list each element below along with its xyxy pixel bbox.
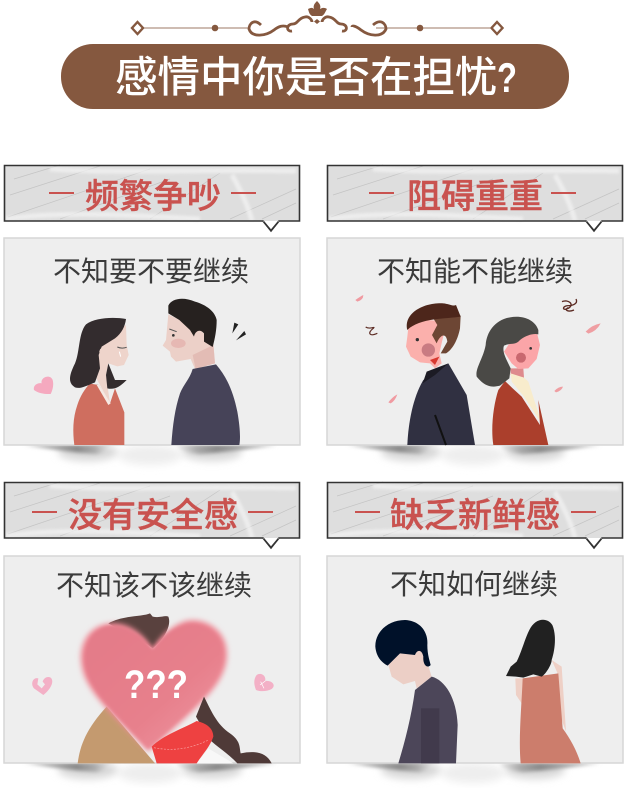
text: 不知能不能继续: 不知能不能继续 <box>377 256 573 287</box>
header: 阻碍重重 <box>328 165 622 231</box>
panel: 没有安全感 <box>4 482 300 783</box>
illustration: back-to-back couple <box>355 295 601 445</box>
header: 没有安全感: 没有安全感 <box>68 497 238 535</box>
illustration: heart hiding couple <box>32 613 274 763</box>
shadow under card <box>24 443 278 465</box>
card background <box>4 556 300 763</box>
panel: 阻碍重重 <box>327 165 623 465</box>
text: 不知如何继续: 不知如何继续 <box>390 569 558 600</box>
illustration: couple turned away <box>375 620 581 763</box>
panel: 缺乏新鲜感 <box>327 482 623 783</box>
text: 不知要不要继续: 不知要不要继续 <box>53 256 249 287</box>
card background <box>4 238 300 445</box>
header: 频繁争吵: 频繁争吵 <box>85 178 221 216</box>
header: 没有安全感 <box>4 482 300 548</box>
shadow under card <box>347 443 601 465</box>
title banner: 感情中你是否在担忧 <box>115 55 498 102</box>
header: 阻碍重重: 阻碍重重 <box>407 178 543 216</box>
panel: 频繁争吵 <box>4 165 300 465</box>
text: 不知该不该继续: 不知该不该继续 <box>56 570 252 601</box>
card background <box>327 556 623 763</box>
header: 缺乏新鲜感 <box>328 482 622 548</box>
shadow under card <box>347 761 601 783</box>
header: 缺乏新鲜感: 缺乏新鲜感 <box>390 497 560 535</box>
header: 频繁争吵 <box>4 165 300 231</box>
shadow under card <box>24 761 278 783</box>
decorative ornament <box>132 1 502 35</box>
text: question marks: ??? <box>124 663 188 707</box>
card background <box>327 238 623 445</box>
illustration: quarrelling couple <box>34 299 246 445</box>
title banner <box>61 44 569 109</box>
title banner: ? <box>497 54 517 101</box>
